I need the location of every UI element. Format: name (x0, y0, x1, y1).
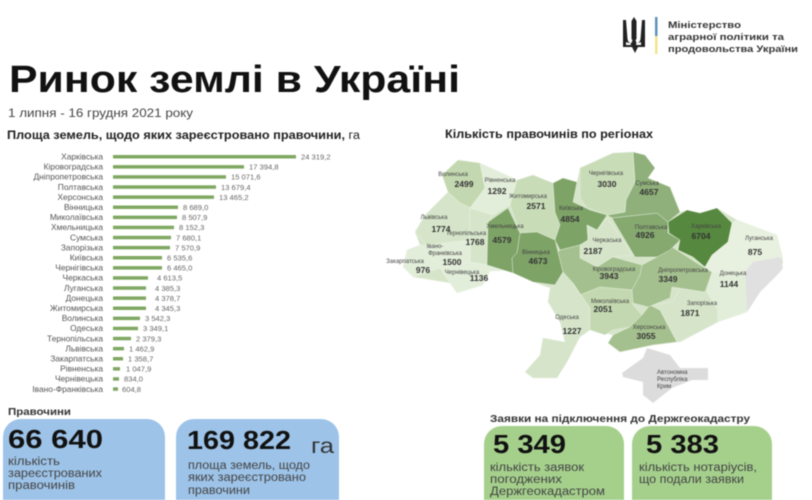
bar chart: area by region: Сумська (70, 232, 103, 242)
bar chart: area by region: Миколаївська (50, 212, 103, 222)
bar chart: area by region: 4 385,3 (155, 284, 180, 293)
region: Житомирська (510, 175, 560, 240)
map labels: 1871 (681, 308, 700, 318)
bar chart: area by region: Одеська (70, 323, 103, 333)
region: Сумська (607, 152, 680, 222)
bar chart: area by region: Тернопільська (47, 333, 103, 343)
map labels: Чернівецька (445, 270, 480, 276)
map labels: 4926 (636, 230, 655, 240)
bar chart: area by region (32, 152, 331, 394)
region: Закарпатська (403, 245, 440, 277)
card: area of land: 169 822 (187, 425, 291, 455)
bar chart: area by region: Донецька (66, 293, 103, 303)
map labels: 3030 (598, 179, 617, 189)
map labels: 6704 (692, 231, 711, 241)
bar chart: area by region: Вінницька (64, 202, 103, 212)
bar chart: area by region: Івано-Франківська (32, 384, 103, 394)
heading: transactions: Правочини (8, 406, 71, 418)
card: number of transactions: зареєстрованих (8, 468, 102, 480)
map labels: 1292 (488, 186, 507, 196)
bar chart: area by region: 15 071,6 (231, 173, 261, 182)
map labels: Чернігівська (589, 171, 624, 177)
region: Івано-Франківська (420, 240, 487, 283)
card: notaries: що подали заявки (639, 474, 744, 486)
map labels: 1144 (720, 279, 738, 289)
map labels: 3055 (637, 331, 656, 341)
bar chart: area by region: Хмельницька (51, 222, 103, 232)
card: number of transactions: правочинів (8, 480, 75, 492)
bar chart: area by region: 604,8 (122, 385, 141, 394)
card: agreed applications: кількість заявок (490, 462, 585, 474)
bar chart: area by region: Запорізька (61, 242, 103, 252)
map labels: Київська (559, 206, 584, 212)
map labels: 4673 (529, 256, 548, 266)
map labels: Тернопільська (446, 231, 487, 237)
bar chart: area by region: Волинська (62, 313, 103, 323)
bar chart: area by region: Чернівецька (55, 374, 103, 384)
bar chart: area by region: 8 507,9 (182, 213, 207, 222)
bar chart: area by region: 4 613,5 (157, 274, 182, 283)
map labels: Харківська (691, 224, 722, 230)
title: Ринок землі в Україні (9, 59, 460, 101)
card: area of land (176, 419, 339, 500)
card: area of land: площа земель, щодо (188, 460, 310, 472)
bar chart: area by region: 6 535,6 (167, 254, 192, 262)
map labels: Кіровоградська (593, 267, 636, 273)
map labels: 1136 (470, 273, 488, 283)
region: Чернігівська (580, 152, 635, 215)
icon: trident (623, 17, 645, 53)
map labels: 2051 (594, 304, 613, 314)
map labels: Полтавська (635, 225, 668, 231)
map labels: 4579 (493, 235, 512, 245)
map labels: 2571 (527, 201, 546, 211)
map labels: 1227 (563, 326, 582, 336)
region: Запорізька (650, 288, 718, 342)
map labels: Франківська (428, 251, 463, 257)
map labels: 1500 (443, 257, 462, 267)
region: Вінницька (512, 232, 563, 285)
bar chart: area by region: 4 345,3 (155, 304, 180, 313)
bar chart: area by region: Кіровоградська (44, 162, 103, 172)
map labels: 4657 (640, 187, 659, 197)
map labels: Рівненська (485, 178, 516, 184)
ministry name: продовольства України (668, 44, 798, 55)
region: Черкаська (580, 218, 633, 267)
card: agreed applications: 5 349 (493, 429, 566, 459)
map labels: Автономна (657, 370, 688, 376)
card: area of land: га (311, 435, 334, 458)
bar chart: area by region: 8 689,0 (183, 203, 208, 212)
bar chart: area by region: 1 462,9 (129, 344, 154, 353)
map labels: 3943 (600, 271, 619, 281)
region: Миколаївська (573, 283, 642, 335)
region: Хмельницька (487, 208, 520, 273)
map labels: Миколаївська (591, 299, 630, 305)
map labels: 4854 (561, 214, 580, 224)
bar chart: area by region: 1 358,7 (128, 354, 153, 364)
card: number of transactions: кількість (8, 456, 60, 468)
map labels: Сумська (635, 181, 659, 187)
region: Крим (622, 348, 708, 403)
bar chart: area by region: Львівська (65, 343, 103, 353)
map labels: 1774 (432, 224, 451, 234)
region: Київська (553, 178, 607, 250)
map labels: 1768 (466, 237, 485, 247)
bar chart: area by region: Полтавська (58, 182, 103, 192)
bar chart: area by region: 3 349,1 (143, 324, 168, 333)
map labels: Закарпатська (386, 259, 425, 265)
bar chart: area by region: 6 465,0 (167, 264, 192, 273)
bar chart: area by region: 13 465,2 (219, 193, 249, 202)
card: area of land: правочини (188, 485, 250, 497)
bar chart: area by region: 2 379,3 (136, 334, 161, 343)
bar chart: area by region: 17 394,8 (249, 163, 279, 172)
heading: applications: Заявки на підключення до Держгеокадастру (490, 413, 750, 425)
bar chart: area by region: 3 542,3 (145, 314, 170, 323)
card: notaries: кількість нотаріусів, (639, 462, 757, 474)
region: Донецька (707, 272, 747, 322)
bar chart: area by region: 24 319,2 (301, 152, 331, 162)
map labels: Хмельницька (486, 224, 524, 230)
card: notaries (632, 426, 772, 500)
map labels: Запорізька (687, 301, 718, 307)
ministry name: Міністерство (668, 20, 741, 31)
map labels: Житомирська (509, 194, 548, 200)
card: agreed applications: Держгеокадастром (490, 486, 605, 498)
bar chart: area by region: Чернігівська (55, 263, 103, 273)
ministry name (668, 20, 798, 55)
bar chart: area by region: Закарпатська (50, 354, 103, 364)
bar chart: area by region: Луганська (64, 283, 103, 293)
heading: area chart: Площа земель, щодо яких зареєстровано правочини, га (7, 130, 361, 142)
choropleth map of Ukraine (386, 152, 783, 403)
region: Чернівецька (440, 262, 513, 293)
card: agreed applications: погоджених (490, 474, 562, 486)
heading: map: Кількість правочинів по регіонах (445, 129, 654, 141)
region: Тернопільська (470, 208, 493, 265)
bar chart: area by region: 13 679,4 (221, 183, 251, 192)
flag stripe (655, 17, 658, 54)
bar chart: area by region: 1 047,9 (126, 365, 151, 374)
map labels: Херсонська (633, 325, 666, 331)
region: Львівська (415, 192, 470, 245)
bar chart: area by region: Дніпропетровська (34, 172, 103, 182)
map labels: 3349 (659, 274, 678, 284)
region: Дніпропетровська (632, 247, 712, 307)
region: Одеська (525, 272, 590, 378)
map labels: Івано- (427, 244, 443, 250)
bar chart: area by region: Харківська (61, 152, 103, 162)
map labels: Волинська (438, 172, 468, 178)
map labels: Крим (657, 384, 671, 390)
map labels: 2187 (584, 246, 603, 256)
region: Кіровоградська (558, 245, 642, 295)
map labels (386, 171, 774, 390)
ministry logo (623, 17, 798, 55)
subtitle: dates: 1 липня - 16 грудня 2021 року (8, 108, 193, 120)
occupied territory: east (745, 257, 783, 312)
card: area of land: яких зареєстровано (188, 472, 306, 484)
card: agreed applications (484, 426, 624, 500)
card: number of transactions: 66 640 (8, 424, 103, 454)
map labels: Луганська (745, 236, 774, 242)
bar chart: area by region: Черкаська (63, 273, 103, 283)
region: Полтавська (612, 213, 680, 257)
map labels: 976 (416, 265, 430, 275)
map labels: Львівська (421, 215, 448, 221)
bar chart: area by region: Рівненська (60, 364, 103, 374)
bar chart: area by region: 834,0 (124, 375, 143, 384)
card: notaries: 5 383 (646, 429, 719, 459)
bar chart: area by region: Житомирська (50, 303, 103, 313)
region: Херсонська (608, 305, 677, 352)
bar chart: area by region: Київська (70, 252, 103, 262)
map labels: Одеська (555, 315, 579, 321)
bar chart: area by region: Херсонська (57, 192, 103, 202)
region: Волинська (442, 160, 485, 208)
map labels: Вінницька (522, 250, 551, 256)
bar chart: area by region: 7 570,9 (175, 243, 200, 252)
region: Рівненська (470, 163, 517, 215)
map labels: Черкаська (592, 238, 622, 244)
map labels: Дніпропетровська (658, 268, 709, 274)
map labels: 2499 (455, 179, 474, 189)
bar chart: area by region: 7 680,1 (176, 233, 201, 242)
map labels: 875 (748, 247, 762, 257)
region: Харківська (668, 208, 732, 267)
bar chart: area by region: 8 152,3 (179, 223, 204, 232)
map silhouette (403, 152, 783, 378)
ministry name: аграрної політики та (668, 32, 785, 43)
map labels: Донецька (720, 271, 747, 277)
bar chart: area by region: 4 378,7 (155, 294, 180, 303)
region: Луганська (705, 220, 783, 272)
card: number of transactions (3, 419, 165, 500)
map labels: Республіка (657, 377, 688, 383)
